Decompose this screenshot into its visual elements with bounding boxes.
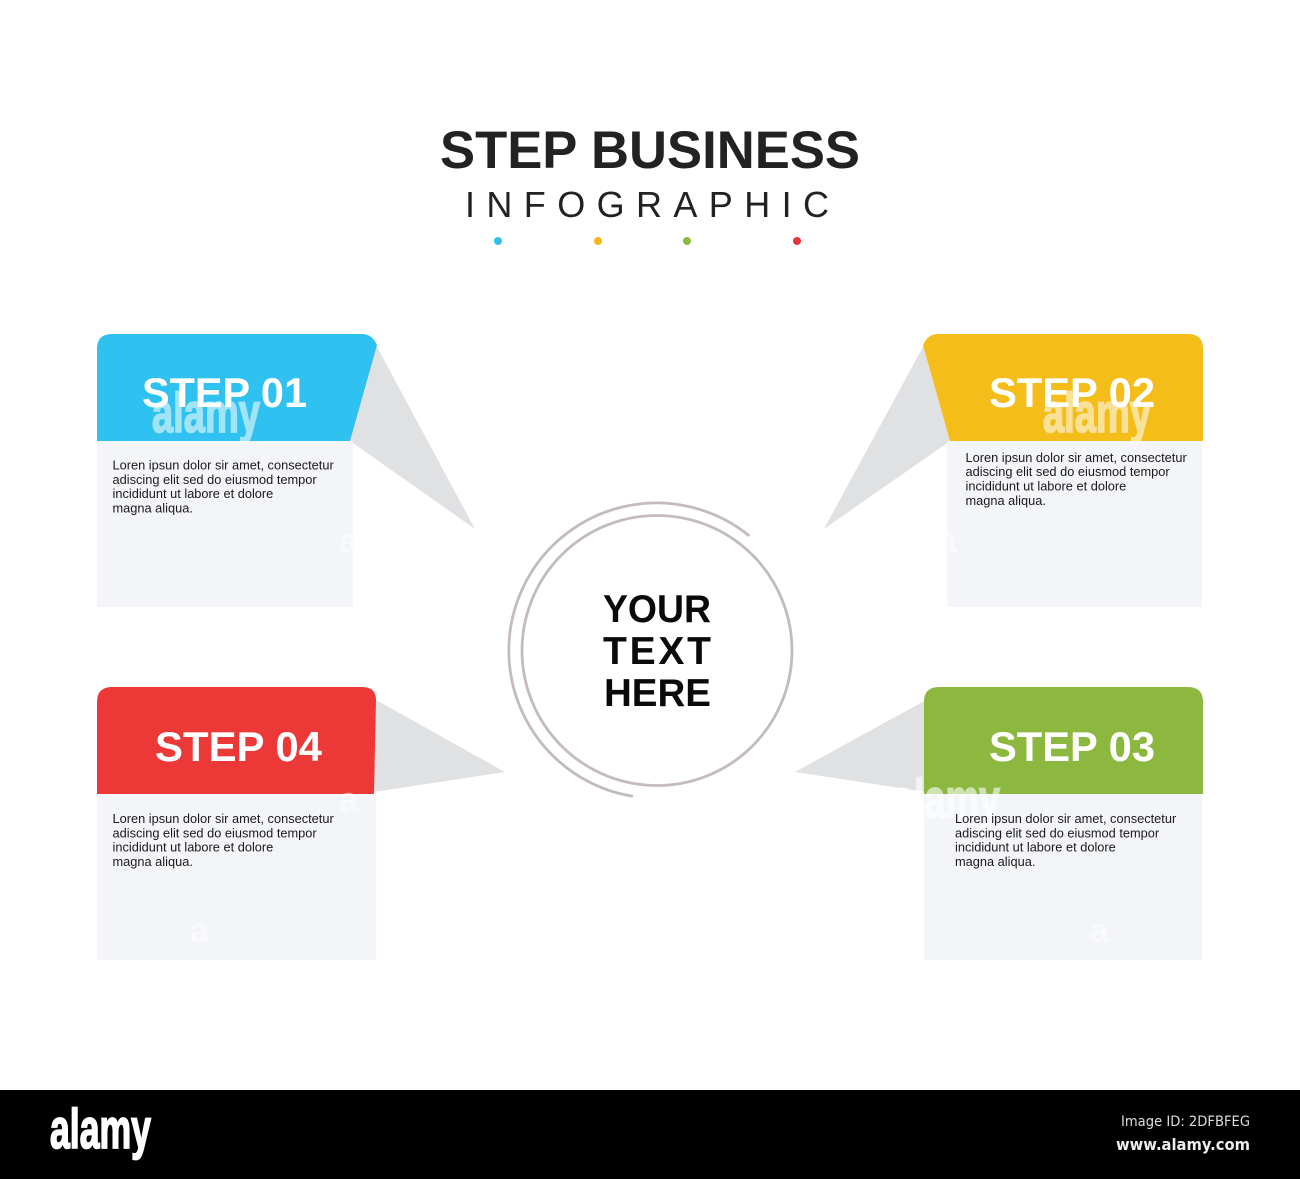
text: step 01: Loren ipsun dolor sir amet, consectetur [112, 458, 334, 472]
watermark letter: step 03: a [1090, 912, 1110, 950]
heading: step 04: STEP 04 [155, 723, 323, 770]
heading: step 02: STEP 02 [989, 369, 1155, 416]
text: step 03: Loren ipsun dolor sir amet, consectetur [955, 811, 1177, 826]
center text: YOUR [603, 588, 711, 631]
panel: step 03 [795, 687, 1203, 960]
center text: TEXT [603, 630, 711, 673]
watermark letter: step 04: a [339, 781, 359, 819]
text: step 02: adiscing elit sed do eiusmod tempor [966, 464, 1170, 479]
text: step 04: Loren ipsun dolor sir amet, consectetur [112, 811, 334, 826]
text: step 01: adiscing elit sed do eiusmod tempor [112, 472, 317, 487]
text: step 03 [955, 811, 1177, 869]
header: step 04 [97, 687, 376, 794]
panel: step 02 [824, 334, 1203, 607]
title [440, 121, 860, 225]
watermark: step 01: alamy [152, 381, 260, 444]
text: step 01: incididunt ut labore et dolore [112, 486, 273, 501]
watermark: step 02: alamy [1043, 381, 1151, 444]
center text: HERE [604, 672, 711, 715]
text: step 01: magna aliqua. [112, 500, 193, 516]
subtitle: INFOGRAPHIC [465, 184, 840, 225]
footer logo: alamy [50, 1097, 151, 1160]
text: step 04: magna aliqua. [112, 854, 193, 869]
header: step 02 [923, 334, 1203, 441]
text: step 02: Loren ipsun dolor sir amet, consectetur [966, 450, 1187, 465]
text: step 02: incididunt ut labore et dolore [966, 478, 1126, 494]
colored dots [494, 237, 801, 245]
text: step 04: incididunt ut labore et dolore [112, 840, 273, 854]
heading: step 01: STEP 01 [142, 369, 307, 416]
outer arc [509, 503, 750, 796]
text: step 04: adiscing elit sed do eiusmod tempor [112, 826, 317, 840]
heading: step 03: STEP 03 [989, 723, 1155, 770]
center circle [509, 503, 792, 796]
text: step 03: magna aliqua. [955, 854, 1035, 869]
header: step 01 [97, 334, 377, 441]
watermark: step 03: alamy [893, 767, 1000, 830]
watermark letter: step 04 lower: a [190, 912, 210, 950]
text: step 03: adiscing elit sed do eiusmod tempor [955, 826, 1160, 840]
pointer: step 03 [795, 700, 926, 792]
text: step 02: magna aliqua. [966, 493, 1046, 508]
body: step 03 [924, 794, 1202, 960]
text: step 04 [112, 811, 334, 869]
header: step 03 [924, 687, 1203, 794]
body: step 04 [97, 794, 376, 960]
pointer: step 01 [350, 345, 475, 529]
watermark letter: step 01: a [339, 522, 359, 560]
image id: Image ID: 2DFBFEG [1121, 1114, 1250, 1130]
website: www.alamy.com [1116, 1135, 1250, 1154]
text: step 02 [966, 450, 1187, 508]
center text [603, 588, 711, 715]
panel: step 04 [97, 687, 505, 960]
pointer: step 02 [824, 345, 950, 529]
watermark letter: step 02: a [938, 522, 958, 560]
text: step 03: incididunt ut labore et dolore [955, 840, 1116, 854]
body: step 02 [947, 441, 1202, 607]
body: step 01 [97, 441, 353, 607]
pointer: step 04 [374, 700, 505, 792]
panel: step 01 [97, 334, 475, 607]
footer bar [0, 1090, 1300, 1179]
title: STEP BUSINESS [440, 121, 860, 180]
text: step 01 [112, 458, 334, 516]
